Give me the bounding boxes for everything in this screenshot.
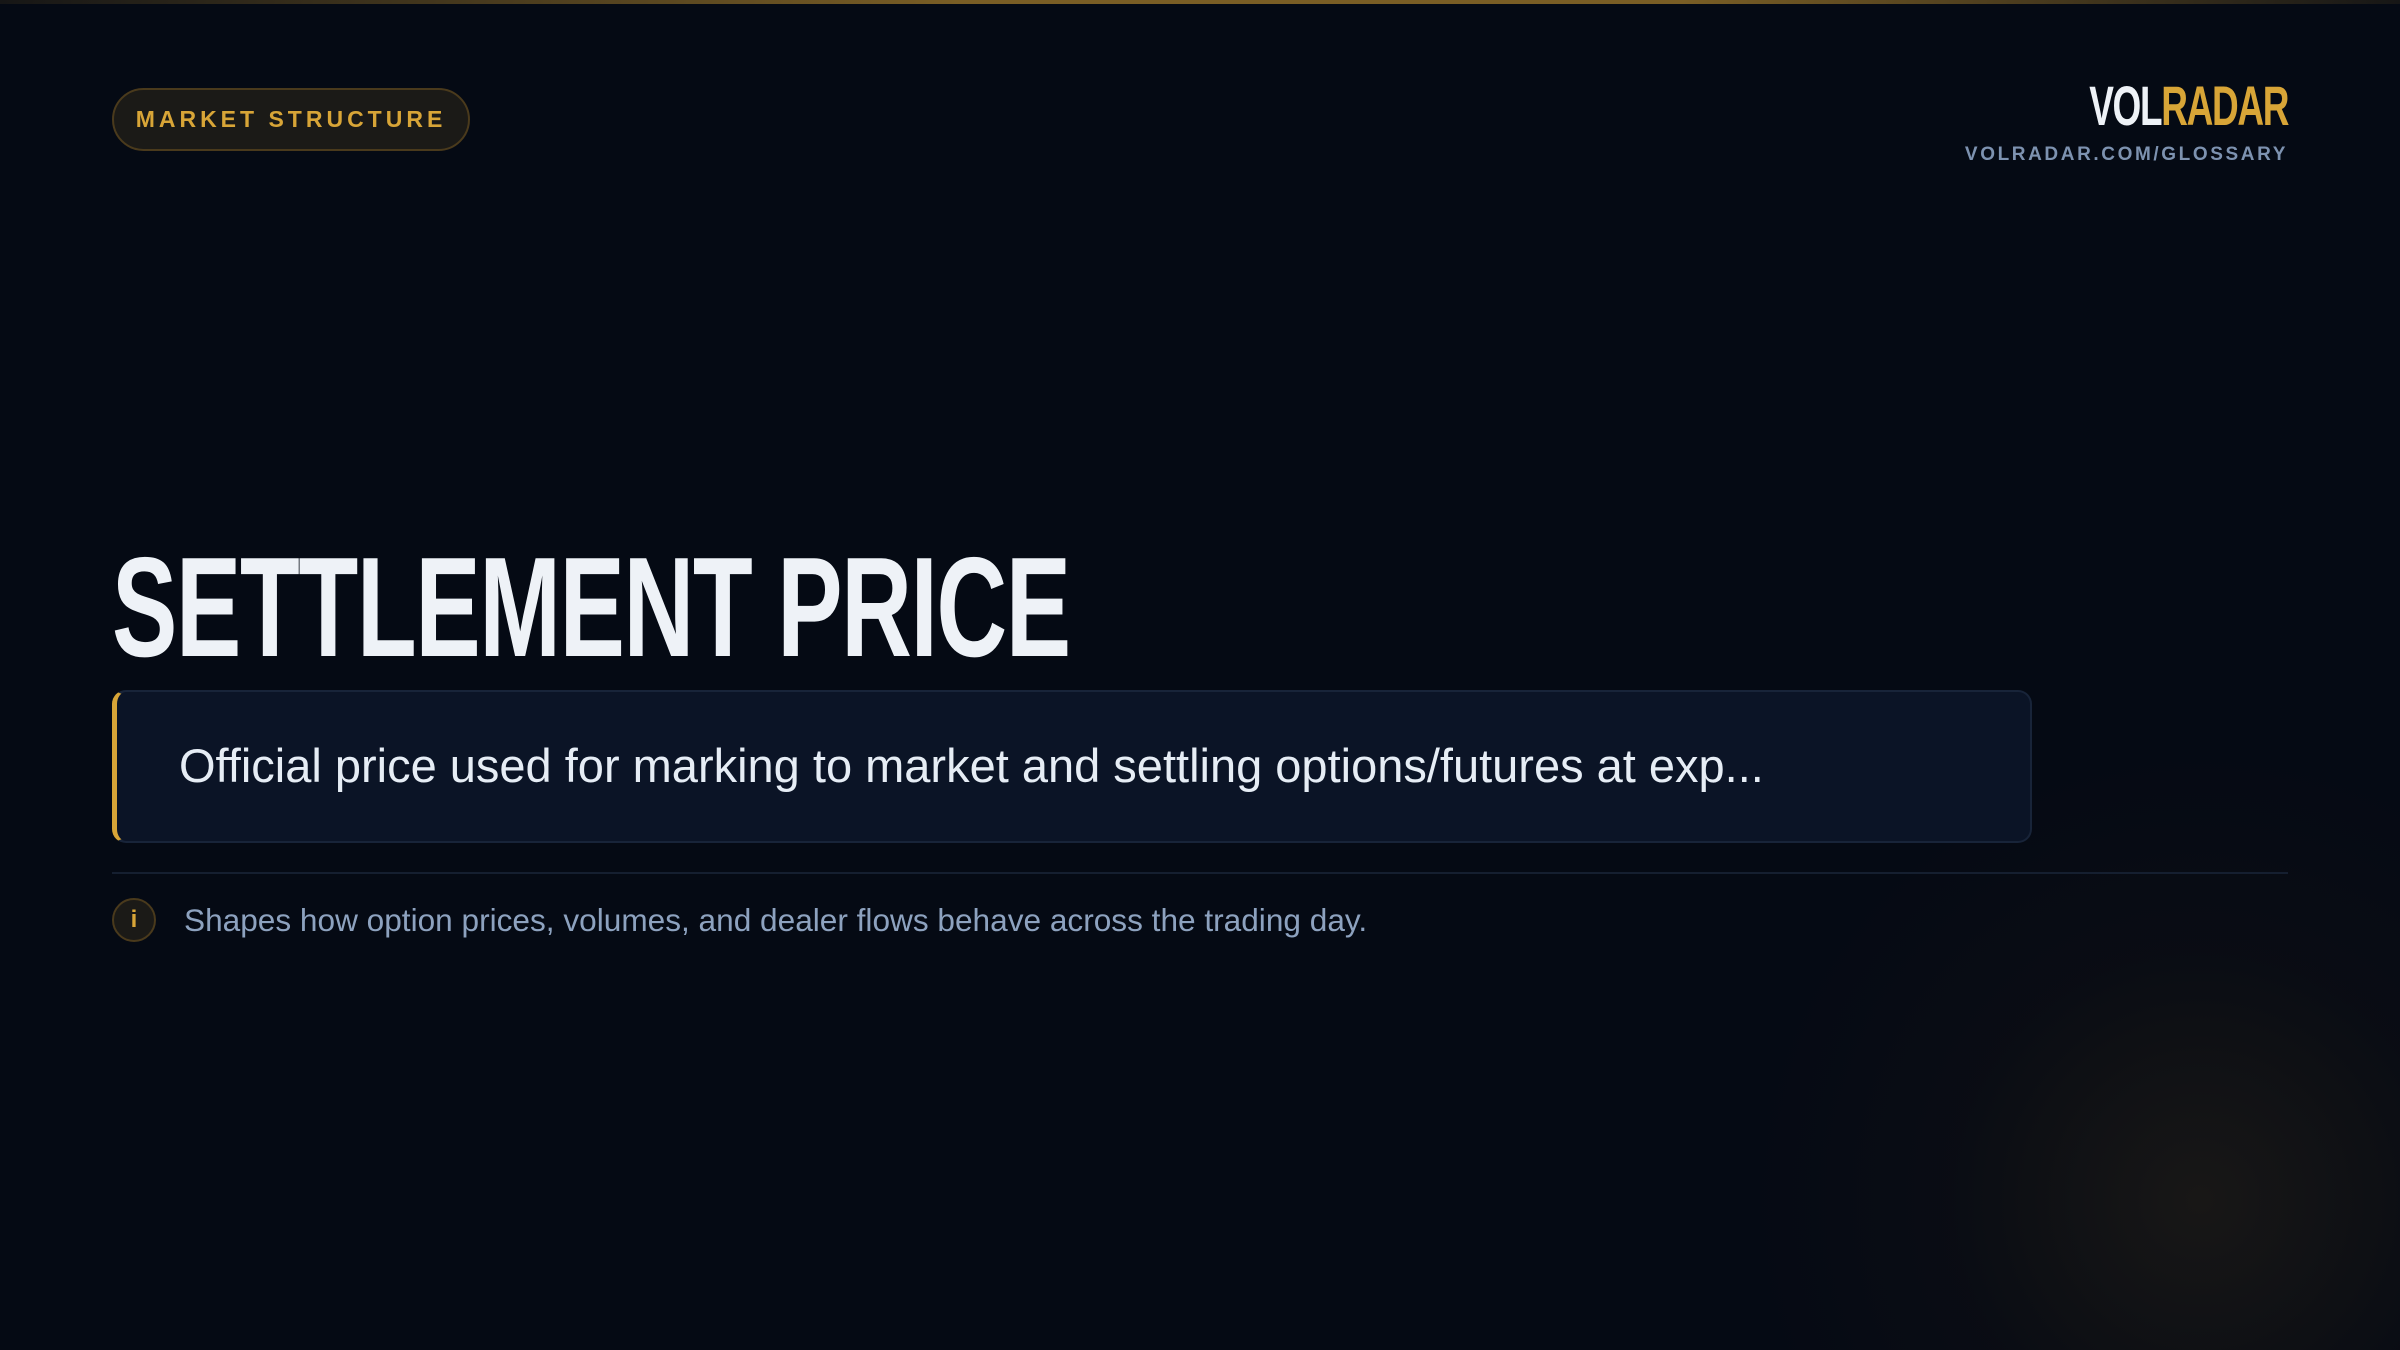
definition text: Official price used for marking to market and settling options/futures at exp... bbox=[179, 739, 1764, 792]
logo url: VOLRADAR.COM/GLOSSARY bbox=[1965, 144, 2288, 165]
pill: category: MARKET STRUCTURE bbox=[136, 106, 446, 132]
note bbox=[112, 898, 1367, 942]
logo bbox=[1965, 74, 2289, 165]
definition box bbox=[112, 690, 2032, 843]
pill: category bbox=[112, 88, 470, 151]
icon: info bbox=[112, 898, 156, 942]
title: SETTLEMENT PRICE bbox=[112, 528, 1070, 687]
note text: Shapes how option prices, volumes, and dealer flows behave across the trading day. bbox=[184, 902, 1367, 938]
icon: info: i bbox=[131, 906, 137, 933]
logo wordmark: VOLRADAR bbox=[2089, 74, 2288, 137]
